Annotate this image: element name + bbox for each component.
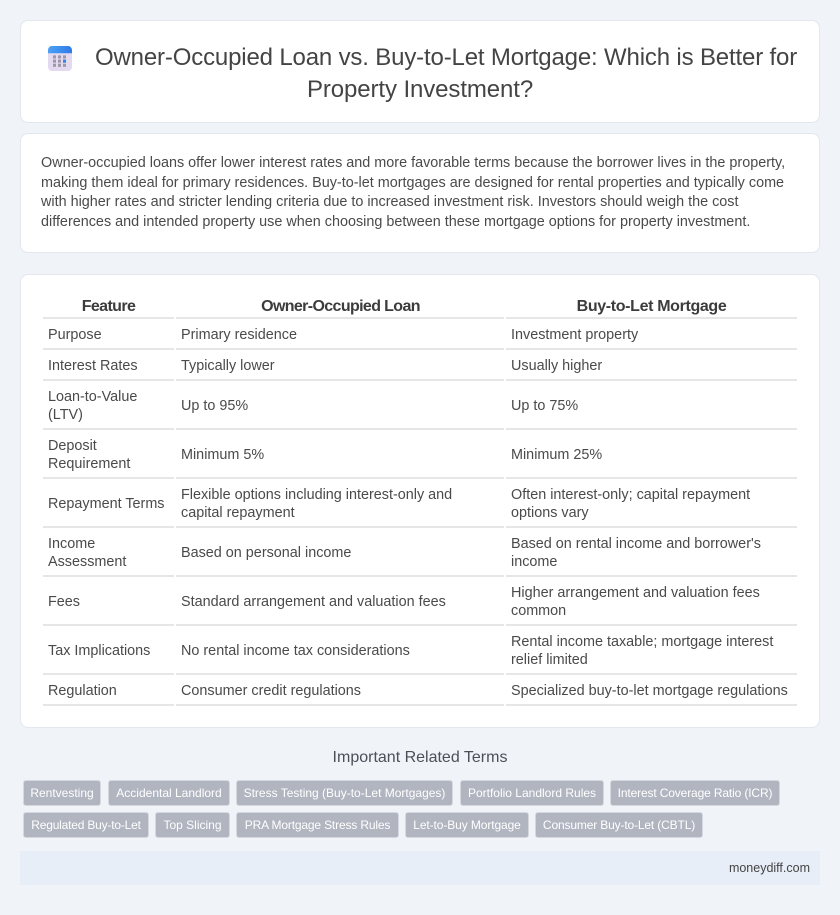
- comparison table: Minimum 25%: [511, 447, 602, 463]
- chip: Rentvesting: [23, 780, 101, 806]
- comparison table: Investment property: [511, 327, 638, 343]
- row: Deposit Requirement: Requirement: [48, 456, 130, 472]
- row: Deposit Requirement: [48, 438, 130, 472]
- comparison table: Typically lower: [181, 358, 275, 374]
- row: Fees: Fees: [48, 594, 80, 610]
- comparison table: Usually higher: [511, 358, 602, 374]
- table header: Owner-Occupied Loan: Owner-Occupied Loan: [261, 298, 420, 315]
- chip: Regulated Buy-to-Let: Regulated Buy-to-Let: [31, 818, 141, 832]
- row: Income Assessment: Income: [48, 536, 95, 552]
- row: Tax Implications: Tax Implications: [48, 643, 150, 659]
- chip: PRA Mortgage Stress Rules: [236, 812, 399, 838]
- panel: introduction: [20, 133, 820, 253]
- row: Regulation: Regulation: [48, 683, 117, 699]
- footer: [20, 851, 820, 885]
- comparison table: Rental income taxable; mortgage interest: [511, 634, 773, 650]
- icon: calendar: [48, 46, 72, 71]
- header card: [20, 20, 820, 123]
- comparison table: income: [511, 554, 557, 570]
- row: Deposit Requirement: Deposit: [48, 438, 97, 454]
- row: Loan-to-Value: [48, 389, 137, 423]
- comparison table: relief limited: [511, 652, 588, 668]
- chip: Stress Testing: [236, 780, 453, 806]
- comparison table: Flexible options including interest-only and: [181, 487, 452, 503]
- intro text: making them ideal for primary residences. Buy-to-let mortgages are designed for rental properties and typically come: [41, 175, 784, 191]
- chip: Portfolio Landlord Rules: [460, 780, 604, 806]
- title: Property Investment?: [307, 76, 533, 103]
- chip: Let-to-Buy Mortgage: [405, 812, 529, 838]
- chip: PRA Mortgage Stress Rules: PRA Mortgage Stress Rules: [245, 818, 390, 832]
- chip: Rentvesting: Rentvesting: [30, 786, 94, 800]
- comparison table: No rental income tax considerations: [181, 643, 410, 659]
- chip: Top Slicing: Top Slicing: [163, 818, 222, 832]
- row: Loan-to-Value: Loan-to-Value: [48, 389, 137, 405]
- chip: Regulated Buy-to-Let: [23, 812, 149, 838]
- comparison table: Consumer credit regulations: [181, 683, 361, 699]
- comparison table: Specialized buy-to-let mortgage regulations: [511, 683, 788, 699]
- row: Income Assessment: [48, 536, 126, 570]
- intro text: [41, 155, 785, 230]
- table header: Buy-to-Let Mortgage: Buy-to-Let Mortgage: [577, 298, 726, 315]
- intro text: with higher rates and stricter lending criteria due to increased investment risk. Investors should weigh the cost: [41, 194, 738, 210]
- chip: Stress Testing: Stress Testing (Buy-to-Let Mortgages): [244, 786, 445, 800]
- title: Owner-Occupied Loan vs. Buy-to-Let Mortgage: Which is Better for: [95, 44, 797, 71]
- comparison table: Based on rental income and borrower's: [511, 536, 761, 552]
- row: Loan-to-Value: (LTV): [48, 407, 83, 423]
- chip: Consumer Buy-to-Let: Consumer Buy-to-Let (CBTL): [543, 818, 695, 832]
- comparison table: [43, 298, 797, 706]
- chip: Top Slicing: [155, 812, 230, 838]
- comparison table: Standard arrangement and valuation fees: [181, 594, 446, 610]
- chip: Portfolio Landlord Rules: Portfolio Landlord Rules: [468, 786, 596, 800]
- comparison table: capital repayment: [181, 505, 295, 521]
- comparison table: Often interest-only; capital repayment: [511, 487, 750, 503]
- comparison table: Primary residence: [181, 327, 297, 343]
- heading: Important Related Terms: Important Related Terms: [333, 749, 507, 766]
- related terms chips: [23, 780, 780, 838]
- chip: Consumer Buy-to-Let: [535, 812, 703, 838]
- chip: Interest Coverage Ratio: Interest Coverage Ratio (ICR): [618, 786, 772, 800]
- row: Purpose: Purpose: [48, 327, 102, 343]
- title: [95, 44, 797, 103]
- comparison table: Minimum 5%: [181, 447, 264, 463]
- table header: Feature: Feature: [82, 298, 135, 315]
- chip: Accidental Landlord: Accidental Landlord: [116, 786, 222, 800]
- comparison table: Higher arrangement and valuation fees: [511, 585, 760, 601]
- chip: Accidental Landlord: [108, 780, 230, 806]
- intro text: Owner-occupied loans offer lower interest rates and more favorable terms because the borrower lives in the property,: [41, 155, 785, 171]
- intro text: differences and intended property use when choosing between these mortgage options for property investment.: [41, 214, 750, 230]
- panel: comparison table: [20, 274, 820, 728]
- footer: source: moneydiff.com: [729, 861, 810, 875]
- row: Interest Rates: Interest Rates: [48, 358, 138, 374]
- comparison table: options vary: [511, 505, 589, 521]
- comparison table: Up to 95%: [181, 398, 248, 414]
- row: Income Assessment: Assessment: [48, 554, 126, 570]
- comparison table: Up to 75%: [511, 398, 578, 414]
- chip: Let-to-Buy Mortgage: Let-to-Buy Mortgage: [413, 818, 521, 832]
- chip: Interest Coverage Ratio: [610, 780, 780, 806]
- row: Repayment Terms: Repayment Terms: [48, 496, 165, 512]
- comparison table: common: [511, 603, 566, 619]
- comparison table: Based on personal income: [181, 545, 351, 561]
